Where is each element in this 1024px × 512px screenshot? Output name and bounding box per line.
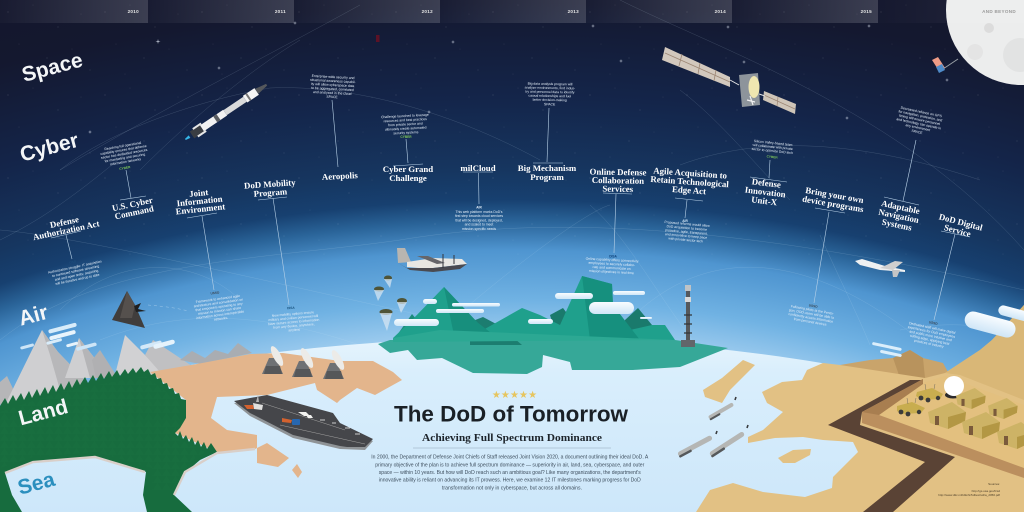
milestone: U.S. Cyber Command: Command <box>114 203 155 221</box>
milestone: Defense Innovation Unit X: Unit-X <box>751 194 778 208</box>
teal mountain island <box>378 276 728 374</box>
milestone: Bring your own device programs <box>787 185 867 328</box>
milestone: Defense Authorization Act: Defense <box>49 214 80 230</box>
milestone: U.S. Cyber Command: CYBER <box>119 165 131 171</box>
milestone: Aeropolis: Aeropolis <box>322 170 359 182</box>
milestone: U.S. Cyber Command <box>99 140 155 221</box>
milestone: Agile Acquisition to Retain Technological Edge Act <box>650 165 730 244</box>
milestone: Joint Information Environment: networks <box>214 316 228 322</box>
milestone: Cyber Grand Challenge <box>381 113 433 183</box>
milestone: Defense Innovation Unit X <box>743 139 794 208</box>
milestone: Joint Information Environment: Framework to enhanced agile <box>195 294 240 304</box>
milestone: DoD Digital Service: experiences for DoD employees <box>907 325 956 339</box>
domain label: Air: Air <box>16 301 50 331</box>
milestone: Agile Acquisition to Retain Technological Edge Act: Edge Act <box>672 184 706 196</box>
milestone: Joint Information Environment: architecture and consolidation on <box>193 298 243 308</box>
milestone: DoD Mobility Program: anytime <box>288 327 301 332</box>
milestone: Defense Innovation Unit X: Defense <box>751 176 782 190</box>
milestone: milCloud: first step towards cloud services <box>455 214 503 218</box>
milestone: Aeropolis: Enterprise-wide security and <box>312 74 355 80</box>
milestone: DoD Mobility Program: New mobility options ensure <box>272 310 314 318</box>
star field <box>0 0 1024 255</box>
milestone: U.S. Cyber Command: U.S. Cyber <box>111 195 154 213</box>
milestone: Adaptable Navigation Systems <box>876 105 944 234</box>
milestone: U.S. Cyber Command: Reaching full operational <box>104 141 142 151</box>
title block <box>371 390 653 491</box>
milestone: Online Defense Collaboration Services: Online Defense <box>590 167 647 177</box>
milestone: Adaptable Navigation Systems: Decreased reliance on GPS <box>900 106 943 119</box>
milestone: DoD Digital Service: and public more intuitive and <box>909 329 952 342</box>
milestone: Bring your own device programs: Following pilots at the Penta- <box>790 304 834 316</box>
milestone: Bring your own device programs: gon, DOD users will be able to <box>789 308 834 320</box>
satellite <box>662 47 796 114</box>
milestone: DoD Digital Service <box>905 211 984 351</box>
milestone: milCloud: milCloud <box>460 163 496 173</box>
milestone: Defense Authorization Act: OSD <box>69 259 77 265</box>
milestone: Adaptable Navigation Systems: any environment <box>905 123 931 132</box>
milestone: Defense Authorization Act: Authorization struggle: IT acquisition <box>48 259 102 275</box>
MQ-9 drone <box>855 259 905 277</box>
forest, land section <box>0 367 255 512</box>
C-130 transport plane <box>397 248 467 272</box>
milestone: Bring your own device programs: confidently access information <box>788 312 834 324</box>
milestone: Online Defense Collaboration Services: Services <box>602 184 634 194</box>
milestone: milCloud: that will be designed, deployed, <box>455 218 503 222</box>
milestone: Big Mechanism Program: Big data analysis program will <box>528 82 573 86</box>
milestone: Cyber Grand Challenge: CYBER <box>400 135 412 139</box>
walled base plateau <box>862 376 1024 478</box>
sources: http://gs.usa.gov/fcsd <box>972 489 1000 493</box>
milestone: Aeropolis: and analyzed in the cloud <box>313 90 352 96</box>
submarines and ships <box>677 397 748 458</box>
domain label: Cyber: Cyber <box>18 129 81 167</box>
intro paragraph: space — within 10 years. But how will DoD reach such an ambitious goal? Like many organizations, the department's <box>379 470 641 476</box>
dirt road <box>828 380 955 512</box>
milestone: Aeropolis: to be aggregated, correlated <box>311 86 354 92</box>
intro paragraph: In 2000, the Department of Defense Joint Chiefs of Staff released Joint Vision 2020, a document outlining their ideal DoD. A <box>371 455 649 461</box>
antenna tower <box>681 285 695 347</box>
rocket <box>182 80 270 144</box>
milestone: Agile Acquisition to Retain Technological Edge Act: Agile Acquisition to <box>653 165 728 181</box>
milestone: Joint Information Environment: USSD <box>210 290 220 295</box>
milestone: Joint Information Environment <box>173 185 246 324</box>
paratroopers <box>374 276 407 331</box>
milestone: Big Mechanism Program: try and personnel data to identify <box>525 90 575 94</box>
milestone: Bring your own device programs: Bring your own <box>805 185 865 205</box>
milestone: DoD Digital Service: USSD <box>928 320 939 326</box>
milestone: Agile Acquisition to Retain Technological Edge Act: Proposed reforms would allow <box>664 220 710 228</box>
milestone: Joint Information Environment: Environment <box>175 201 226 216</box>
milestone: Aeropolis: ity will allow cyberspace data <box>311 82 355 88</box>
left clouds <box>20 322 175 351</box>
milestone: DoD Digital Service: practices of industry <box>914 339 944 349</box>
milestone: Big Mechanism Program: analyze environments, find indus- <box>525 86 575 90</box>
milestone: Online Defense Collaboration Services: DISA <box>609 254 618 258</box>
aircraft carrier <box>234 395 373 450</box>
milestone: Big Mechanism Program <box>518 82 577 182</box>
milestone: Joint Information Environment: that empowers operating to any <box>195 302 243 312</box>
milestone: Defense Innovation Unit X: CYBER <box>766 154 779 160</box>
milestone: Agile Acquisition to Retain Technological Edge Act: Retain Technological <box>650 174 730 189</box>
globe grid lines <box>0 0 1024 360</box>
small tan island <box>292 464 302 478</box>
milestone: DoD Mobility Program: DISA <box>287 306 296 310</box>
milestone: Defense Authorization Act: to continued software streaming <box>52 264 100 278</box>
earth sea surface <box>0 338 1024 512</box>
milestone: Adaptable Navigation Systems: Systems <box>881 217 913 233</box>
timeline year header <box>0 0 1024 23</box>
milestone: Online Defense Collaboration Services: mission objectives in real time <box>589 269 634 275</box>
armored vehicles <box>897 384 943 416</box>
milestone: DoD Digital Service: Dedicated staff will make digital <box>909 321 956 335</box>
timeline year header: 2011 <box>275 9 286 14</box>
milestone: Cyber Grand Challenge: Challenge launched to leverage <box>381 113 429 119</box>
milestone: Cyber Grand Challenge: security systems <box>393 130 419 135</box>
timeline year header: 2010 <box>128 9 139 14</box>
desert land, right <box>696 305 1024 512</box>
domain label: Land: Land <box>16 395 71 430</box>
milestone: U.S. Cyber Command: sector has dedicated resources <box>101 148 148 160</box>
intro paragraph: primary objective of the plan is to achieve full spectrum dominance — superiority in air, land, sea, cyberspace, and outer <box>375 462 645 468</box>
sources: Sources: <box>988 482 1000 486</box>
milestone: DoD Digital Service: DoD Digital <box>938 211 984 233</box>
milestone: milCloud: and scaled to meet <box>465 223 493 227</box>
milestone: Big Mechanism Program: better decision-making <box>533 98 567 102</box>
milestone: Defense Authorization Act: will be iterative and up to date <box>55 273 100 286</box>
milestone: Joint Information Environment: Information <box>176 194 223 208</box>
sources: http://www.dtic.mil/dtic/tr/fulltext/u2/a_2050.pdf <box>938 493 1000 497</box>
milestone: Cyber Grand Challenge: ultimately create automated <box>385 125 427 132</box>
icon: flag planted on the moon <box>932 57 958 73</box>
domain label: Sea: Sea <box>15 468 58 500</box>
milestone: Cyber Grand Challenge: Cyber Grand <box>383 164 433 174</box>
milestone: Joint Information Environment: mission to mission can share <box>198 306 241 316</box>
clouds over teal island <box>394 291 652 326</box>
milestone: Adaptable Navigation Systems: and technology can operate in <box>896 117 941 130</box>
milestone: Defense Innovation Unit X: Innovation <box>744 184 786 199</box>
milestone: Adaptable Navigation Systems: timing will ensure personnel <box>899 114 941 126</box>
milestone: Cyber Grand Challenge: resources and best practices <box>383 117 427 123</box>
milestone: Online Defense Collaboration Services: Online capability offers connectivity <box>586 257 639 263</box>
milestone: U.S. Cyber Command: for monitoring and securing <box>104 152 146 163</box>
sources <box>938 482 1000 497</box>
domain label: Space: Space <box>19 49 85 87</box>
subtitle: Achieving Full Spectrum Dominance <box>422 433 602 444</box>
milestone: Big Mechanism Program: SPACE <box>544 102 556 107</box>
milestone: milCloud: AIR <box>476 206 482 210</box>
milestone: Defense Authorization Act <box>30 210 105 287</box>
grey mountains, left <box>0 330 252 405</box>
milestone: Agile Acquisition to Retain Technological Edge Act: and innovative to keep pace <box>665 232 707 240</box>
milestone: Joint Information Environment: information across interoperable <box>196 309 244 320</box>
milestone: Adaptable Navigation Systems: Adaptable <box>880 198 921 216</box>
milestone: Aeropolis: SPACE <box>326 95 338 99</box>
main title: The DoD of Tomorrow <box>394 402 629 426</box>
milestone: DoD Mobility Program: DoD Mobility <box>244 177 296 191</box>
milestone: Aeropolis: situational awareness capabil- <box>310 78 356 84</box>
milestone: milCloud: This web platform marks DoD's <box>456 210 503 214</box>
milestone: Joint Information Environment: Joint <box>189 187 209 199</box>
milestone: Aeropolis <box>309 74 359 182</box>
milestone: Agile Acquisition to Retain Technological Edge Act: DoD acquisition to become <box>666 224 707 232</box>
radome <box>944 376 964 398</box>
milestone: Online Defense Collaboration Services <box>585 167 647 275</box>
milestone: milCloud <box>455 163 503 231</box>
milestone: DoD Mobility Program: from any device, anywhere, <box>273 322 315 330</box>
milestone: Online Defense Collaboration Services: rate and communicate on <box>592 265 631 271</box>
intro paragraph: innovative ability is reliant on advancing its IT prowess. Here, we examine 12 IT milestones marking progress for DoD <box>379 478 641 484</box>
milestone: DoD Mobility Program: Program <box>253 186 288 199</box>
milestone: Adaptable Navigation Systems: for navigation, protection, and <box>898 109 943 123</box>
milestone: Defense Authorization Act: and and open tests; acquiring <box>54 269 99 282</box>
milestone: Defense Innovation Unit X: Silicon Valley-based team <box>754 139 793 147</box>
clouds over desert <box>872 304 1024 357</box>
milestone: Adaptable Navigation Systems: Navigation <box>878 207 920 225</box>
milestone: Agile Acquisition to Retain Technological Edge Act: proactive, agile, transparent, <box>665 228 708 236</box>
intro paragraph: transformation not only in cyberspace, but across all domains. <box>442 485 582 491</box>
milestone: Bring your own device programs: from personal devices <box>793 317 827 327</box>
milestone: Cyber Grand Challenge: from private sector and <box>388 121 423 127</box>
milestone: U.S. Cyber Command: capability ensures that defense <box>100 144 147 156</box>
radar dishes <box>262 345 347 379</box>
F-117 stealth fighter <box>112 291 188 328</box>
timeline year header: AND BEYOND <box>982 9 1016 14</box>
milestone: Bring your own device programs: device programs <box>801 194 865 214</box>
milestone: Bring your own device programs: USSD <box>808 303 819 309</box>
timeline year header: 2015 <box>861 9 872 14</box>
milestone: Adaptable Navigation Systems: SPACE <box>911 129 924 135</box>
milestone: DoD Digital Service: Service <box>943 222 972 239</box>
rating stars: ★★★★★ <box>492 390 537 401</box>
timeline year header: 2012 <box>422 9 433 14</box>
milestone: Big Mechanism Program: Program <box>530 172 564 182</box>
milestone: Online Defense Collaboration Services: Collaboration <box>592 175 644 186</box>
milestone: Big Mechanism Program: Big Mechanism <box>518 163 577 173</box>
tents <box>928 388 1024 449</box>
milestone: DoD Digital Service: cutting edge, applying best <box>910 334 950 346</box>
milestone: Defense Innovation Unit X: will collaborate with private <box>752 143 793 151</box>
milestone: Defense Authorization Act: Authorization Act <box>32 218 100 242</box>
milestone: Defense Innovation Unit X: sector to optimize DoD tech <box>751 147 793 155</box>
milestone: Agile Acquisition to Retain Technological Edge Act: AIR <box>682 219 688 223</box>
tan land, left continent <box>150 353 402 467</box>
milestone: Online Defense Collaboration Services: employees to securely collabo- <box>588 261 635 267</box>
milestone: Agile Acquisition to Retain Technological Edge Act: with private sector tech <box>668 236 703 243</box>
milestone: milCloud: mission-specific needs <box>462 227 496 231</box>
milestone: DoD Mobility Program <box>244 177 320 334</box>
milestone: Cyber Grand Challenge: Challenge <box>389 173 427 183</box>
timeline year header: 2014 <box>715 9 726 14</box>
timeline year header: 2013 <box>568 9 579 14</box>
milestone: U.S. Cyber Command: information networks <box>110 157 142 166</box>
milestone: DoD Mobility Program: have secure access to information <box>268 318 320 326</box>
milestone: DoD Mobility Program: military and civilian personnel will <box>268 314 319 322</box>
milestone: Big Mechanism Program: causal relationships and fuel <box>528 94 571 98</box>
moon <box>946 0 1024 85</box>
